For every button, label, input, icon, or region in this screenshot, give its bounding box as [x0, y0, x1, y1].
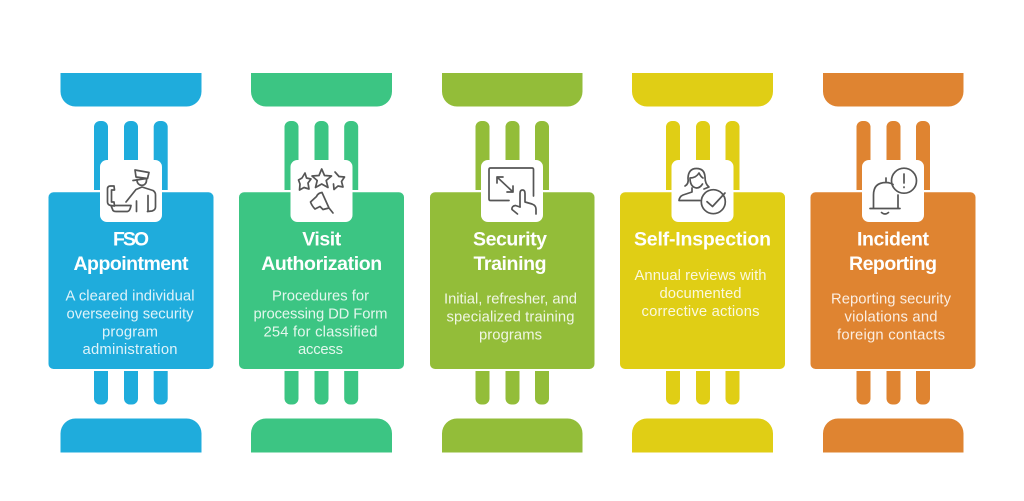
- panel: Incident Reporting: foreign contacts: [837, 328, 945, 344]
- icon: expand screen with tapping hand: [489, 168, 536, 214]
- panel: Security Training: programs: [479, 328, 542, 344]
- panel: Security Training: specialized training: [446, 310, 574, 326]
- panel: FSO Appointment: [48, 73, 214, 452]
- bottom cap: [442, 418, 582, 452]
- description: Annual reviews with: [634, 268, 766, 284]
- panel: Self-Inspection: corrective actions: [642, 304, 760, 320]
- panel: Security Training: Training: [474, 253, 546, 275]
- icon tile: [672, 160, 734, 222]
- lower connector bars: [666, 371, 740, 404]
- panel: Visit Authorization: processing DD Form: [254, 306, 388, 322]
- top cap: [823, 73, 964, 106]
- panel: Self-Inspection: [620, 73, 785, 452]
- icon: bell with alert: [870, 168, 916, 214]
- panel: FSO Appointment: program: [102, 324, 158, 340]
- description: Procedures for: [272, 288, 369, 304]
- upper connector bars: [856, 121, 930, 190]
- card: [430, 192, 594, 369]
- heading: Visit: [302, 228, 342, 250]
- bottom cap: [632, 418, 773, 452]
- panel: FSO Appointment: overseeing security: [66, 306, 194, 322]
- icon: security officer at desk: [108, 170, 156, 212]
- panel: Incident Reporting: [810, 73, 976, 452]
- bottom cap: [823, 418, 964, 452]
- lower connector bars: [476, 371, 549, 404]
- description: Initial, refresher, and: [444, 292, 577, 308]
- icon tile: [290, 160, 352, 222]
- panel: Incident Reporting: violations and: [844, 310, 938, 326]
- top cap: [60, 73, 202, 106]
- description: A cleared individual: [66, 288, 194, 304]
- bottom cap: [251, 418, 392, 452]
- heading: Incident: [857, 228, 930, 250]
- upper connector bars: [476, 121, 549, 190]
- panel: Visit Authorization: 254 for classified: [264, 324, 378, 340]
- icon: three stars and pointing hand: [298, 169, 344, 213]
- top cap: [251, 73, 392, 106]
- panel: Security Training: [430, 73, 594, 452]
- panel: Visit Authorization: Authorization: [261, 253, 382, 275]
- heading: Security: [473, 228, 547, 250]
- lower connector bars: [856, 371, 930, 404]
- panel: FSO Appointment: administration: [82, 342, 178, 358]
- icon tile: [862, 160, 924, 222]
- lower connector bars: [94, 371, 168, 404]
- upper connector bars: [94, 121, 168, 190]
- card: [620, 192, 785, 369]
- upper connector bars: [666, 121, 740, 190]
- top cap: [442, 73, 582, 106]
- card: [239, 192, 404, 369]
- panel: Visit Authorization: access: [298, 342, 343, 358]
- card: [48, 192, 214, 369]
- card: [810, 192, 976, 369]
- panel: FSO Appointment: Appointment: [74, 253, 189, 275]
- upper connector bars: [284, 121, 358, 190]
- panel: Self-Inspection: documented: [660, 286, 742, 302]
- heading: Self-Inspection: [634, 228, 771, 250]
- panel: Incident Reporting: Reporting: [849, 253, 937, 275]
- icon tile: [100, 160, 162, 222]
- icon: person with check mark: [679, 168, 725, 214]
- bottom cap: [60, 418, 202, 452]
- lower connector bars: [284, 371, 358, 404]
- icon tile: [481, 160, 543, 222]
- heading: FSO: [113, 228, 149, 250]
- description: Reporting security: [831, 292, 952, 308]
- panel: Visit Authorization: [239, 73, 404, 452]
- top cap: [632, 73, 773, 106]
